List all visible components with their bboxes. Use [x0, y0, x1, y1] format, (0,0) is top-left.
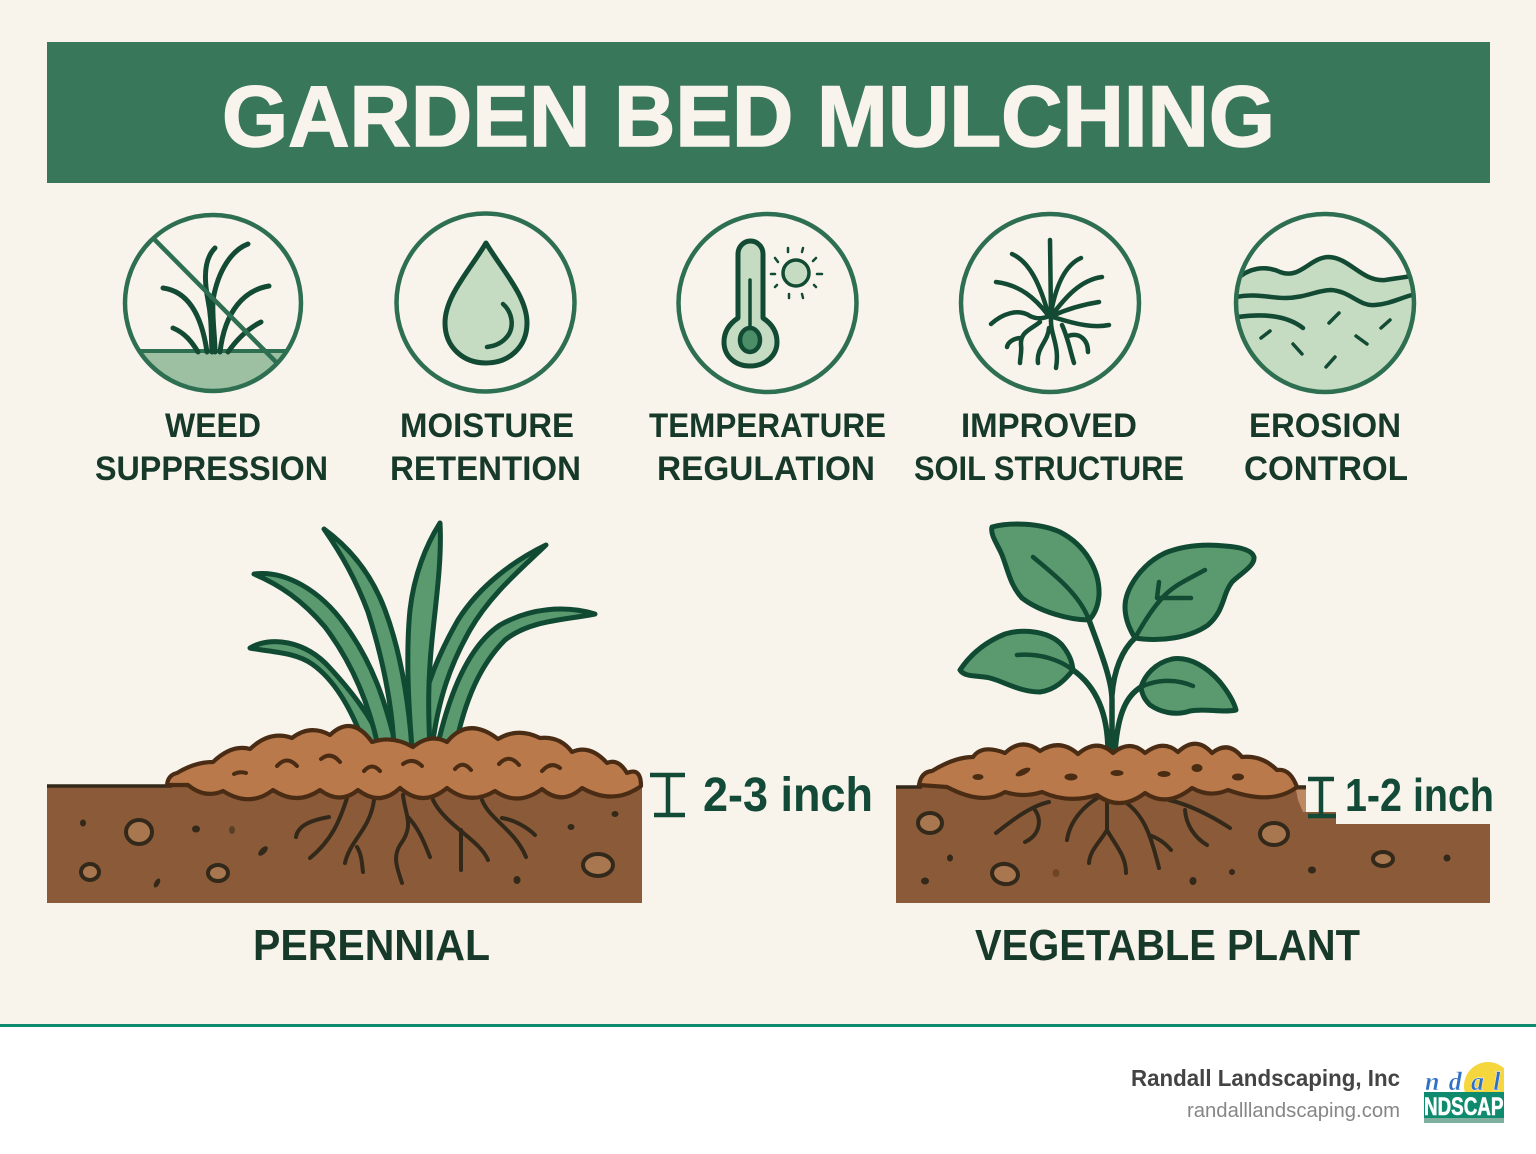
panel: improved soil structure — [914, 214, 1184, 488]
icon: water drop — [396, 214, 574, 392]
label: EROSION — [1249, 407, 1401, 445]
title: GARDEN BED MULCHING — [222, 69, 1275, 165]
label: vegetable plant: VEGETABLE PLANT — [975, 921, 1360, 970]
icon: no weeds — [125, 215, 301, 391]
label: MOISTURE — [400, 407, 574, 445]
label — [390, 407, 581, 488]
panel: temperature regulation — [649, 214, 886, 488]
company name: Randall Landscaping, Inc — [1131, 1065, 1400, 1091]
mulch mound — [919, 744, 1297, 803]
soil cross-section — [47, 785, 642, 903]
panel: moisture retention — [390, 214, 581, 488]
depth bracket: 1-2 inch: 1-2 inch — [1345, 769, 1494, 821]
panel: erosion control — [1230, 214, 1420, 488]
label: WEED — [165, 407, 261, 445]
label: SUPPRESSION — [95, 450, 328, 488]
icon: roots — [961, 214, 1139, 392]
logo: ndall — [1425, 1067, 1518, 1096]
label: SOIL STRUCTURE — [914, 450, 1184, 488]
label — [649, 407, 886, 488]
mulch mound — [167, 726, 641, 799]
label: perennial: PERENNIAL — [253, 921, 490, 970]
label — [914, 407, 1184, 488]
perennial leaves — [250, 523, 595, 748]
soil stones — [918, 813, 1450, 886]
panel: weed suppression — [95, 215, 328, 488]
label — [95, 407, 328, 488]
label: CONTROL — [1244, 450, 1408, 488]
label — [1244, 407, 1408, 488]
footer — [0, 1024, 1536, 1154]
panel: perennial diagram — [47, 523, 873, 970]
roots — [996, 797, 1230, 873]
icon: thermometer and sun — [678, 214, 856, 392]
panel: vegetable plant diagram — [896, 524, 1494, 970]
depth bracket: 2-3 inch: 2-3 inch — [703, 769, 873, 822]
label: IMPROVED — [961, 407, 1137, 445]
soil cross-section — [896, 787, 1490, 903]
vegetable plant — [960, 524, 1254, 752]
label: REGULATION — [657, 450, 875, 488]
label: TEMPERATURE — [649, 407, 886, 445]
roots — [296, 795, 535, 883]
soil stones — [80, 811, 618, 889]
website: randalllandscaping.com — [1187, 1100, 1400, 1122]
label: RETENTION — [390, 450, 581, 488]
icon: eroded soil layers — [1230, 214, 1420, 400]
logo — [1424, 1062, 1504, 1123]
title banner — [47, 42, 1490, 183]
